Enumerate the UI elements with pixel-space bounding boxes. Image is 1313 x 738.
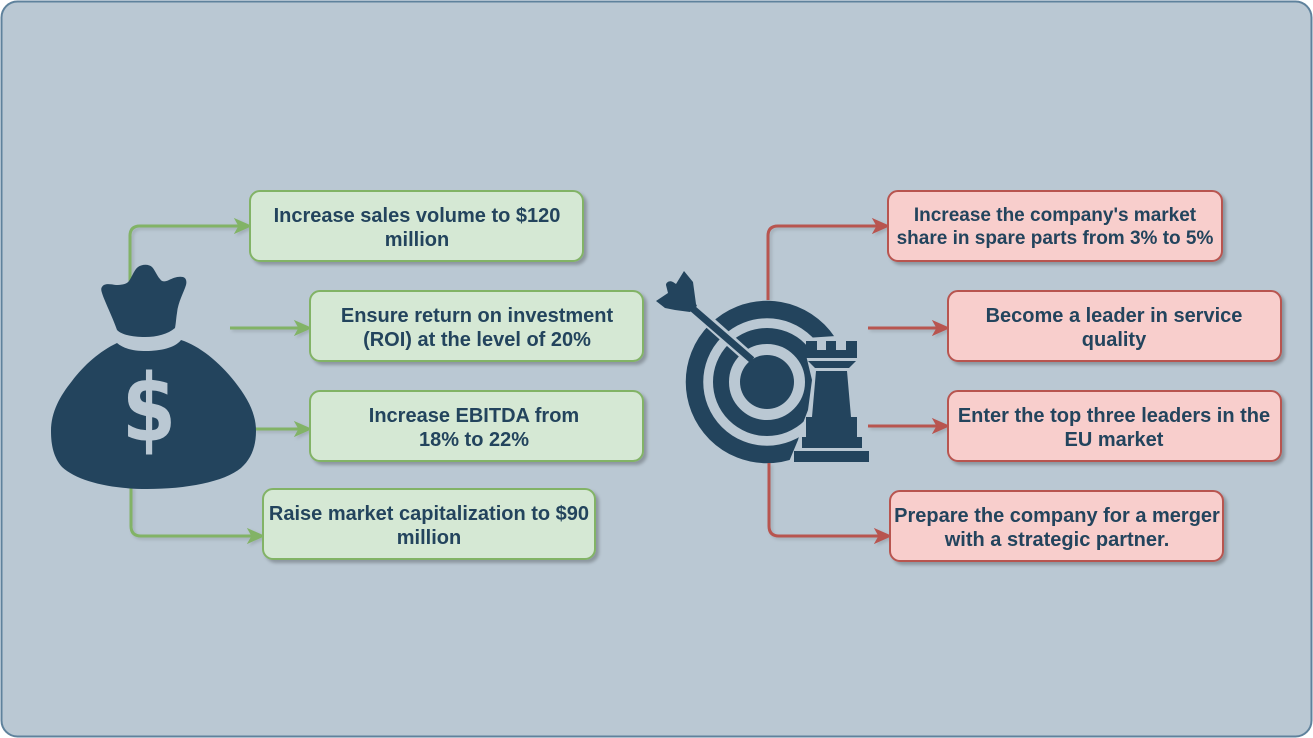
goal box: sales volume	[250, 191, 583, 261]
goal box: EU market	[948, 391, 1281, 461]
goal box: sales volume: million	[385, 229, 449, 251]
arrow: bag to sales volume	[130, 219, 251, 282]
arrow: bag to EBITDA	[254, 422, 311, 436]
arrow: target to merger	[769, 463, 891, 543]
goal box: market share: Increase the company's market	[914, 205, 1197, 226]
goal box: service quality: Become a leader in service	[986, 305, 1242, 327]
goal box: return on investment	[310, 291, 643, 361]
arrow: bag to ROI	[230, 321, 311, 335]
goal box: return on investment: Ensure return on investment	[341, 305, 613, 327]
goal box: EBITDA: Increase EBITDA from	[369, 405, 579, 427]
goal box: service quality	[948, 291, 1281, 361]
goal box: return on investment: (ROI) at the level of 20%	[363, 329, 591, 351]
strategic goals group	[656, 191, 1281, 561]
goal box: merger: Prepare the company for a merger	[894, 505, 1220, 527]
arrow: target to service quality	[868, 321, 949, 335]
goal box: market capitalization: Raise market capitalization to $90	[269, 503, 589, 525]
financial goals group	[51, 191, 643, 559]
arrow: bag to market capitalization	[131, 486, 264, 543]
rook	[794, 341, 869, 462]
goal box: market capitalization	[263, 489, 595, 559]
arrow: target to EU market	[868, 419, 949, 433]
goal box: sales volume: Increase sales volume to $120	[274, 205, 560, 227]
goal box: market share: share in spare parts from 3% to 5%	[897, 228, 1213, 249]
goal box: merger: with a strategic partner.	[944, 529, 1169, 551]
icon: target with dart and rook	[656, 271, 875, 467]
goal box: EU market: EU market	[1065, 429, 1164, 451]
goal box: market capitalization: million	[397, 527, 461, 549]
goal box: merger	[890, 491, 1223, 561]
goal box: EBITDA	[310, 391, 643, 461]
goal box: service quality: quality	[1082, 329, 1147, 351]
icon: money bag	[51, 265, 256, 489]
goal box: market share	[888, 191, 1222, 261]
goal box: EU market: Enter the top three leaders in the	[958, 405, 1270, 427]
goal box: EBITDA: 18% to 22%	[419, 429, 529, 451]
dollar sign: $	[122, 355, 176, 463]
arrow: target to market share	[768, 219, 889, 300]
